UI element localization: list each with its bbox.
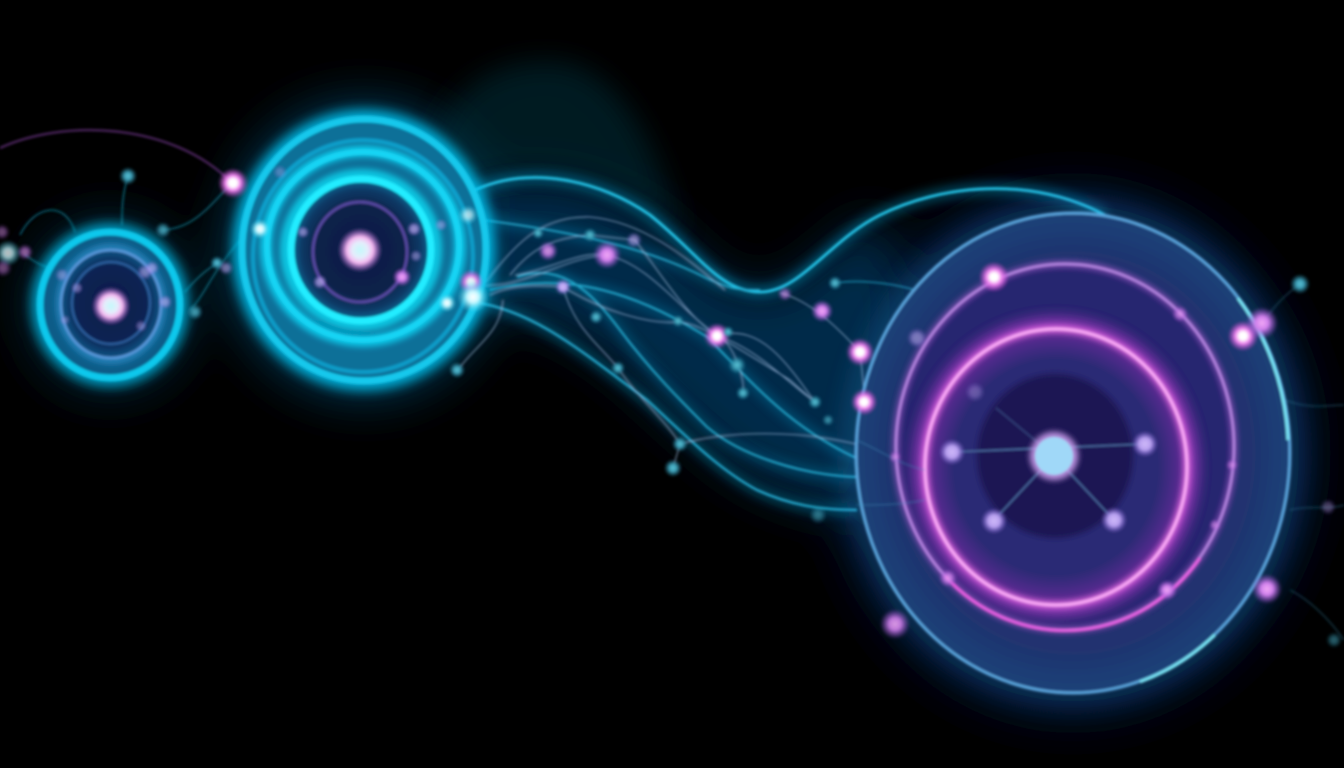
glowing nodes xyxy=(0,165,1342,648)
left side lines xyxy=(0,130,232,183)
large ring cluster xyxy=(856,213,1290,693)
cyan ring highlights xyxy=(1140,298,1288,682)
faint lines over big ring xyxy=(856,440,925,505)
hub nodes xyxy=(939,382,1158,534)
flowing connection lines xyxy=(0,130,1344,640)
small left ring cluster xyxy=(39,231,181,379)
faint smoke plume xyxy=(430,61,680,235)
hub spokes xyxy=(952,408,1145,520)
medium ring cluster xyxy=(241,118,487,382)
main scene xyxy=(0,118,1344,693)
ambient glows xyxy=(28,102,1315,718)
